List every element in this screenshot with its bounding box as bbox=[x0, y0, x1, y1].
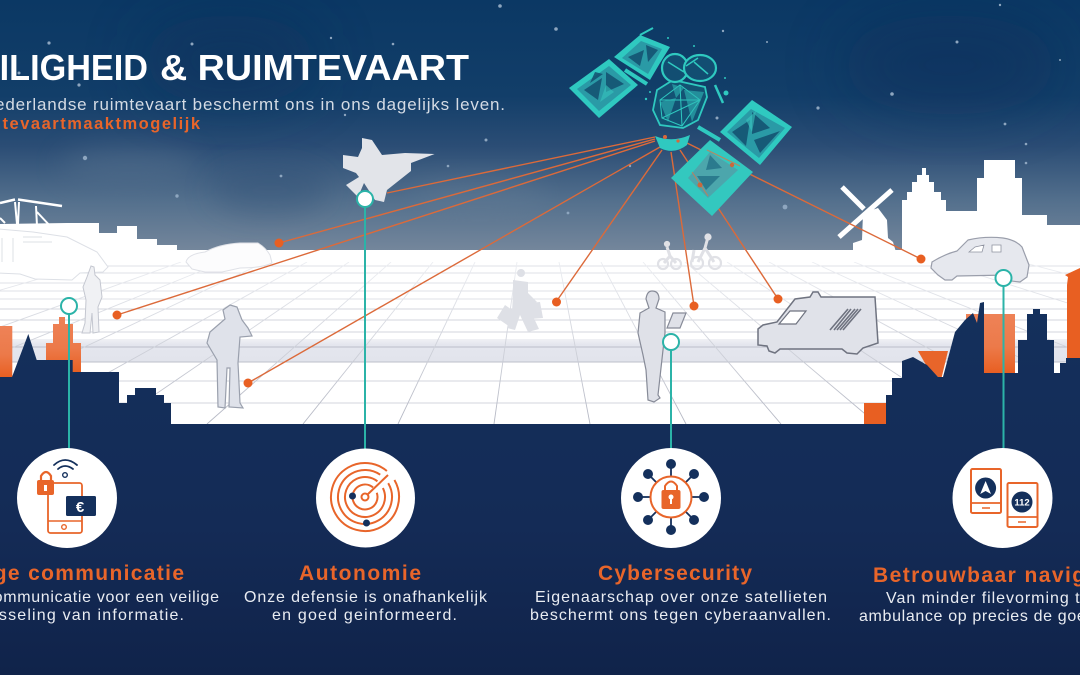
block: autonomie: en goed geinformeerd. bbox=[272, 607, 457, 624]
icon: secure communication bbox=[17, 448, 117, 548]
navy foreground with skyline bbox=[0, 302, 1080, 675]
block: betrouwbaar navigatie bbox=[859, 564, 1080, 625]
teal connector: communicatie bbox=[61, 298, 77, 450]
block: cybersecurity bbox=[530, 562, 831, 624]
person with laptop bbox=[638, 291, 686, 402]
solar panel lower-left bbox=[569, 59, 638, 118]
white ground plane and left skyline bbox=[0, 223, 1080, 430]
block: autonomie: Autonomie bbox=[299, 562, 421, 585]
person with shopping bags bbox=[497, 269, 543, 332]
satellite bbox=[569, 28, 792, 216]
solar panel upper-left bbox=[614, 28, 670, 84]
icon: navigation and 112 phones bbox=[952, 448, 1052, 548]
sky background bbox=[0, 0, 1080, 252]
right skyline orange buildings bbox=[864, 268, 1080, 424]
solar panel right bbox=[720, 100, 792, 165]
title: & RUIMTEVAART bbox=[160, 47, 469, 88]
orange signal endpoints bbox=[112, 238, 926, 388]
satellite body bbox=[645, 37, 728, 151]
icon: network lock bbox=[621, 448, 721, 548]
left car bbox=[186, 243, 272, 272]
teal connector: navigatie bbox=[996, 270, 1012, 450]
background dome building bbox=[0, 229, 108, 280]
teal connector: autonomie bbox=[357, 191, 373, 450]
block: autonomie bbox=[244, 562, 488, 624]
title bbox=[0, 47, 469, 88]
solar panel lower bbox=[671, 140, 753, 216]
block: veilige communicatie bbox=[0, 562, 219, 624]
left skyline orange buildings bbox=[0, 317, 81, 377]
icon: navigation and 112 phones: 112 bbox=[1014, 498, 1030, 508]
block: autonomie: Onze defensie is onafhankelijk bbox=[244, 589, 488, 606]
icon: radar bbox=[316, 448, 415, 548]
block: cybersecurity: Eigenaarschap over onze satellieten bbox=[535, 589, 827, 606]
floor grid bbox=[0, 262, 1080, 424]
block: cybersecurity: Cybersecurity bbox=[598, 562, 752, 585]
orange signal lines bbox=[117, 137, 921, 383]
cyclists bbox=[658, 234, 721, 269]
person on phone, small bbox=[82, 266, 102, 333]
bridge structure bbox=[0, 200, 62, 228]
right white city skyline bbox=[902, 160, 1080, 252]
fighter jet bbox=[343, 138, 435, 202]
teal connector: cybersecurity bbox=[663, 334, 679, 450]
right car bbox=[931, 237, 1029, 282]
block: cybersecurity: beschermt ons tegen cyberaanvallen. bbox=[530, 607, 831, 624]
ambulance bbox=[758, 292, 878, 354]
person on phone bbox=[207, 305, 252, 408]
icon: secure communication: € bbox=[76, 499, 85, 516]
icon: windmill bbox=[839, 187, 896, 252]
